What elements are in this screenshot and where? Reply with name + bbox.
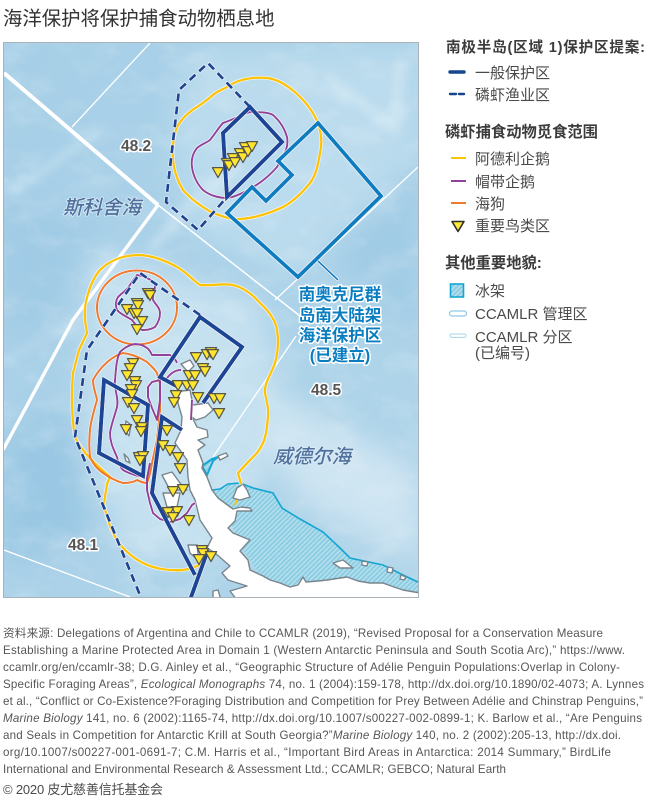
CCAMLR subarea lines [3,43,418,597]
islands [181,360,194,372]
legend: CCAMLR subarea [450,329,573,362]
Adelie penguin range: north [173,78,321,219]
foraging ranges [72,78,321,570]
legend heading: other features: 其他重要地貌: [445,254,542,272]
source notes: org/10.1007/s00227-001-0691-7; C.M. Harris et al., “Important Bird Areas in Antarctica: 2014 Summary,” BirdLife [3,746,611,759]
title: 海洋保护将保护捕食动物栖息地 [3,8,274,30]
legend: chinstrap penguin [451,173,535,191]
legend: Adelie penguin: 阿德利企鹅 [475,150,550,168]
legend: CCAMLR management area: CCAMLR 管理区 [475,306,588,323]
source notes: Marine Biology 141, no. 6 (2002):1165-74, http://dx.doi.org/10.1007/s00227-002-0899-1; K. Barlow et al., “Are Penguins [3,712,642,725]
krill fishery zones [75,63,250,600]
zone label 48.1: 48.1 [68,537,99,554]
MPA label: (已建立) [310,345,370,365]
zone label 48.2: 48.2 [121,138,151,155]
source notes: Specific Foraging Areas”, Ecological Monographs 74, no. 1 (2004):159-178, http://dx.doi.org/10.1890/02-4073; A. Lynnes [3,678,644,691]
MPA label [299,284,382,365]
map panel [3,42,420,600]
source notes: et al., “Conflict or Co-Existence?Foraging Distribution and Competition for Prey Between Adélie and Chinstrap Penguins,” [3,695,643,708]
South Orkney MPA [227,123,381,277]
legend [445,38,645,362]
legend: fur seal [451,196,505,213]
legend: fur seal: 海狗 [475,196,505,213]
legend: important bird area: 重要鸟类区 [475,218,550,235]
legend heading: proposal: 南极半岛(区域 1)保护区提案: [446,38,645,56]
legend heading: predators: 磷虾捕食动物觅食范围 [445,123,598,141]
map border [4,42,418,598]
source notes: 资料来源: Delegations of Argentina and Chile to CCAMLR (2019), “Revised Proposal for a Conservation Measure [3,626,603,640]
legend: ice shelf: 冰架 [475,283,505,300]
zone label 48.5: 48.5 [311,382,342,399]
small ice shelf [202,457,218,475]
source notes: ccamlr.org/en/ccamlr-38; D.G. Ainley et al., “Geographic Structure of Adélie Penguin Populations:Overlap in Colony- [3,661,620,674]
legend: CCAMLR subarea: (已编号) [475,345,530,362]
ocean background [3,42,419,598]
MPA label: 岛南大陆架 [299,305,381,325]
ice shelf [212,483,420,596]
legend: ice shelf [450,283,505,300]
chinstrap penguin ranges [110,112,287,522]
legend: CCAMLR subarea: CCAMLR 分区 [475,329,573,346]
general protection zones [99,107,282,600]
sea label: Weddell Sea: 威德尔海 [273,446,354,468]
yellow range crossing ice shelf [234,500,238,506]
legend: krill fishery zone: 磷虾渔业区 [475,87,550,104]
Antarctic Peninsula land [124,360,420,600]
legend: chinstrap penguin: 帽带企鹅 [475,173,535,191]
important bird areas [120,142,258,565]
source notes [3,626,644,776]
proposed protection zones [75,63,381,600]
sea label: Scotia Sea: 斯科舍海 [63,197,144,219]
Adelie penguin range: south [72,255,278,570]
copyright: © 2020 皮尤慈善信托基金会 [3,782,163,797]
MPA label: 海洋保护区 [299,325,381,345]
source notes: and Seals in Competition for Antarctic Krill at South Georgia?”Marine Biology 140, no. 2 (2002):205-13, http://dx.doi. [3,729,621,742]
source notes: International and Environmental Research & Assessment Ltd.; CCAMLR; GEBCO; Natural Earth [3,763,506,776]
legend: general protection zone: 一般保护区 [475,65,550,82]
MPA label: 南奥克尼群 [299,284,382,304]
source notes: Establishing a Marine Protected Area in Domain 1 (Western Antarctic Peninsula and South Scotia Arc),” https://www. [3,644,625,657]
fur seal range [97,270,177,344]
